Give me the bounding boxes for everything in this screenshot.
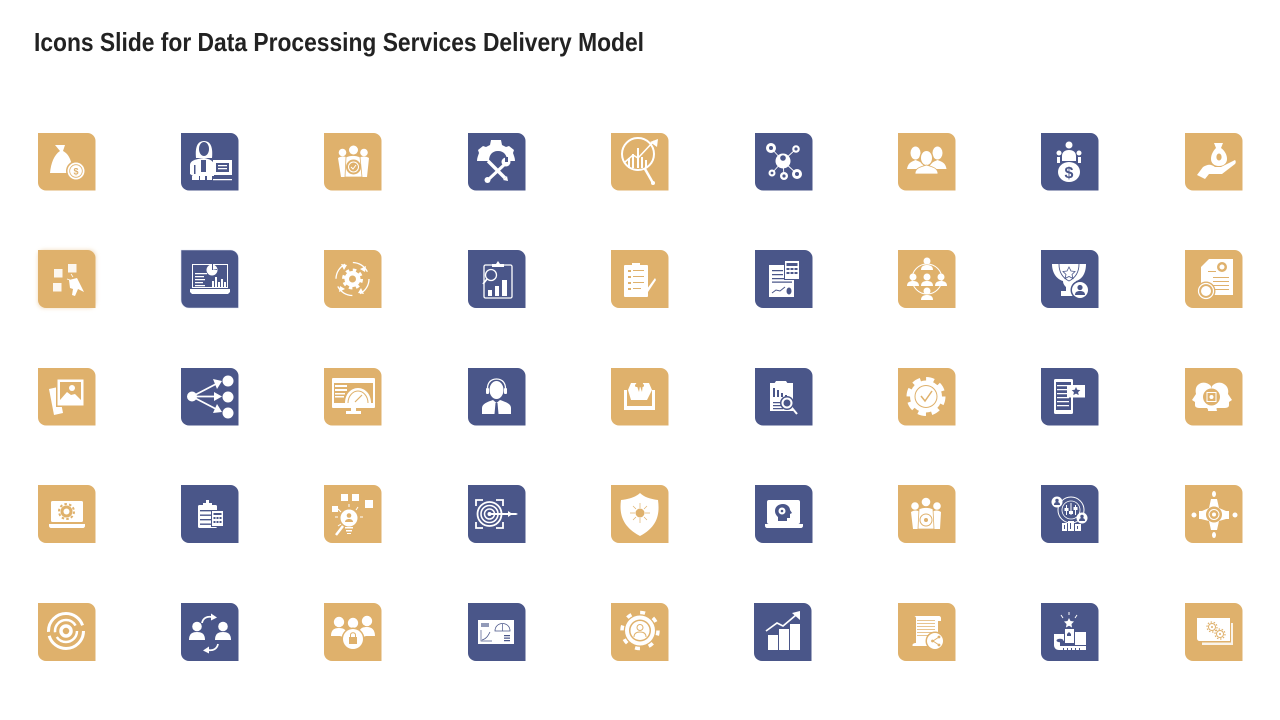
icon: scroll with share badge [898,603,956,661]
icon: shield with burst [611,485,668,543]
icon: report clipboard with magnifier [755,368,812,426]
icon: circular maze [38,603,96,661]
icon: people above dollar coin: $ [1065,165,1074,182]
icon: idea bulb with magnifier [324,485,382,543]
icon: circle of people [898,250,956,308]
icon: magnifier with growth chart [611,133,668,190]
icon: hand holding money bag [1185,133,1242,190]
icon: shopping bag basket [611,368,668,426]
icon: laptop with thinking head [755,485,812,543]
icon: money bag and coin: $ [73,166,79,176]
icon: team with gear [898,485,956,543]
icon: checklist with pen [611,250,668,308]
icon: two people exchange [181,603,238,661]
icon: gear with wrench and pencil [468,133,526,190]
icon: megaphone with notes [38,250,96,308]
icon: growth bars with arrow [754,603,812,661]
icon: document with calculator [755,250,812,308]
icon: people above dollar coin [1041,133,1098,190]
icon: people with market data [1041,485,1098,543]
icon: team with gear check [324,133,382,190]
icon: podium with star and measuring tape [1041,603,1098,661]
icon: one-to-many arrows [181,368,238,426]
icon: target with dart [468,485,526,543]
icon: phone with rating star [1041,368,1098,426]
icon: team with lock badge [324,603,382,661]
icon: clipboard with magnifier and bars [468,250,526,308]
icon: woman with data screen [181,133,238,190]
icon: three business people [898,133,956,190]
icon: laptop with gear [38,485,96,543]
icon: trophy with person badge [1041,250,1098,308]
icon: dashboard report [468,603,526,661]
icon: people network [755,133,812,190]
icon: gear with check mark [898,368,956,426]
icon: picture stack [38,368,96,426]
icon: documents with gears [1185,603,1242,661]
icon: two heads sharing idea [1185,368,1242,426]
icon: people around a center [1185,485,1242,543]
icon: clipboard with calculator [181,485,238,543]
icon: monitor with speed gauge [324,368,382,426]
icon: gear with cycle arrows [324,250,382,308]
icon: report with clock [1185,250,1242,308]
icon: support agent with headset [468,368,526,426]
icon: laptop analytics [181,250,238,308]
icon: money bag and coin [38,133,96,190]
icon: gears around a person [611,603,668,661]
